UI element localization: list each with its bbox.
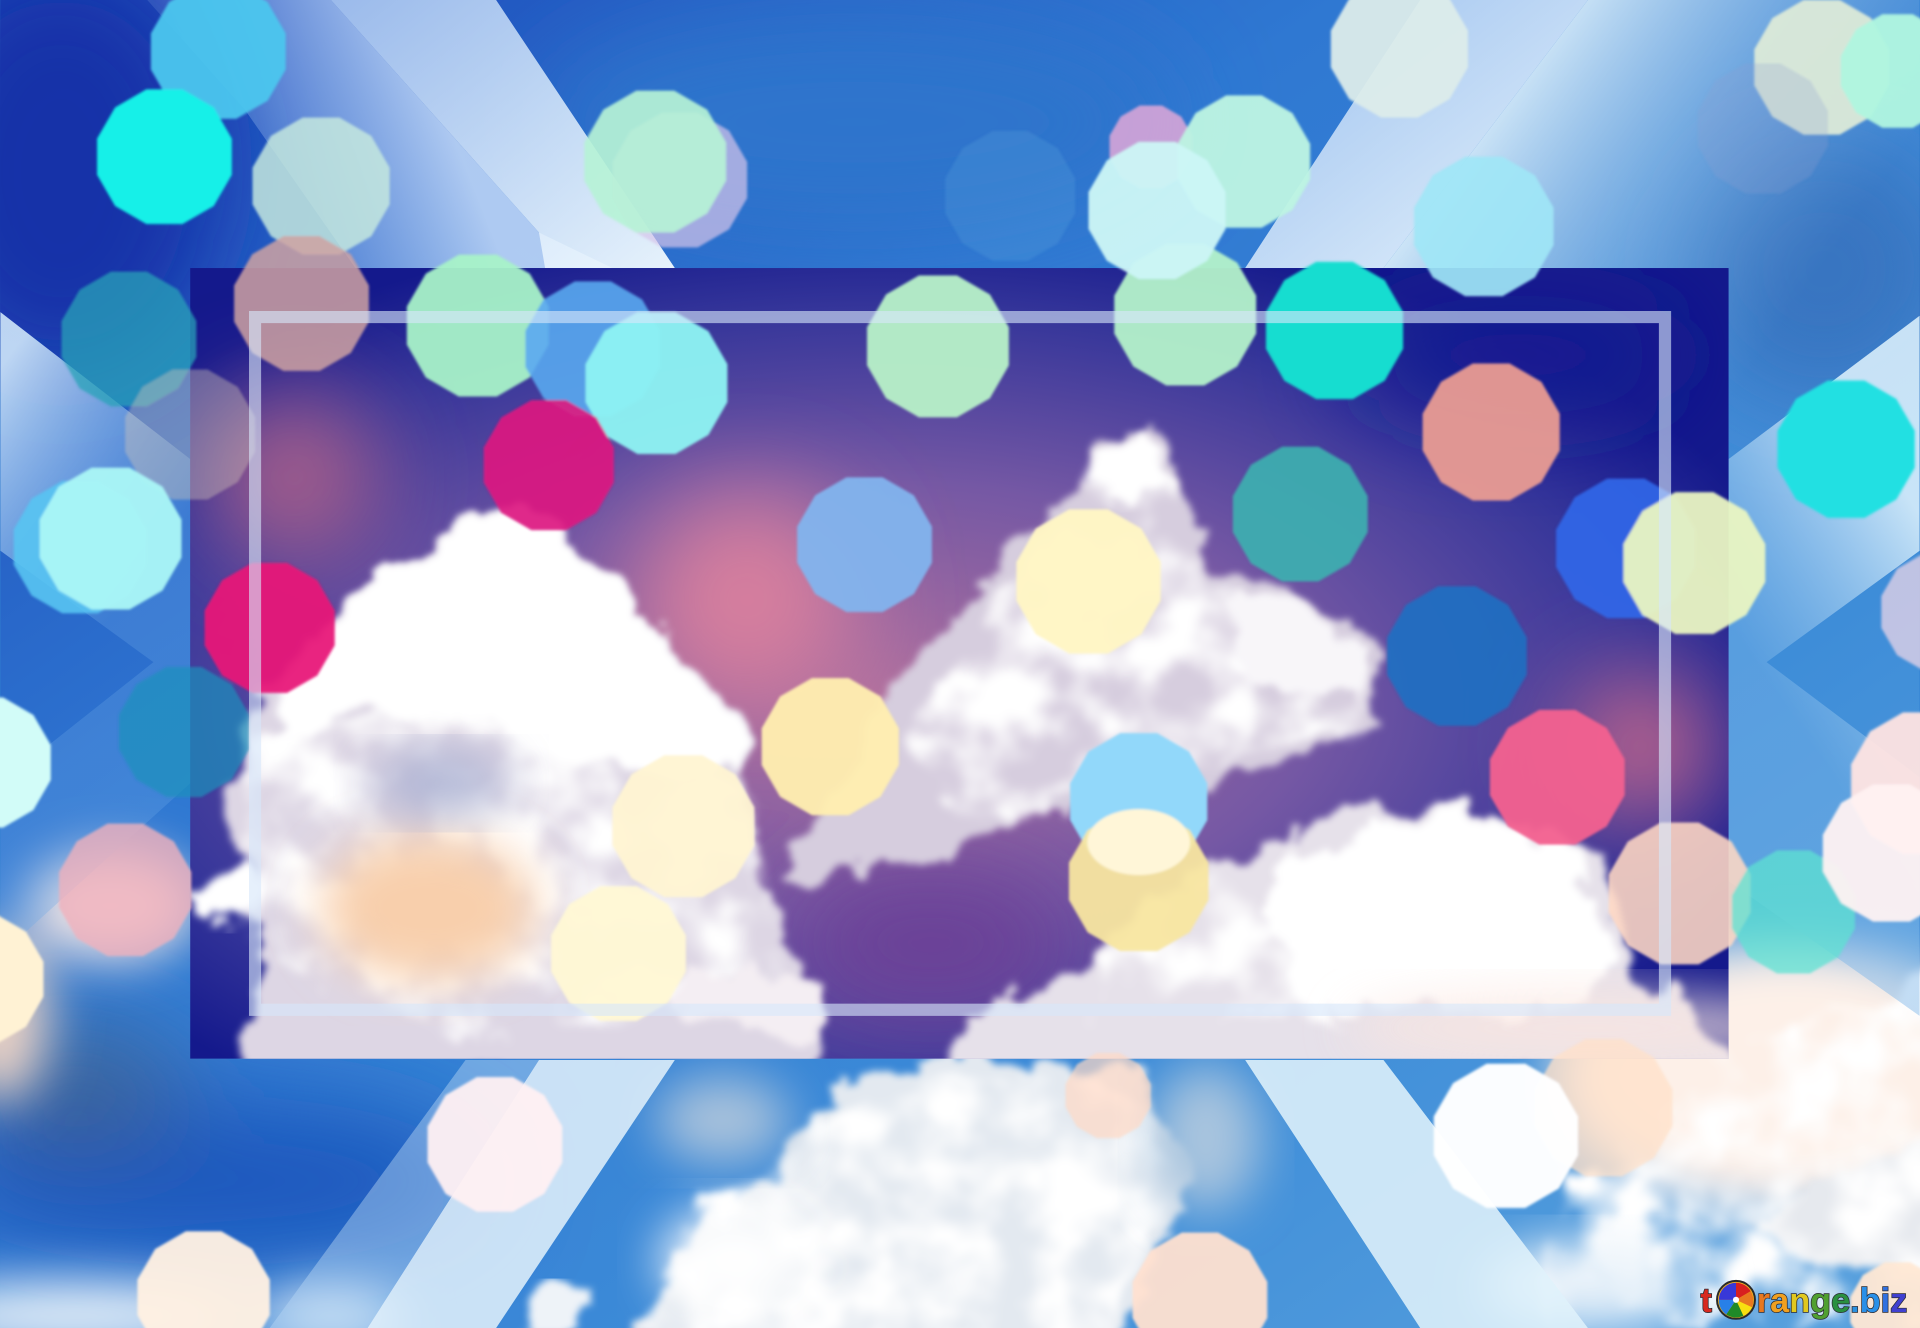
- shard: top left: [147, 0, 675, 268]
- bokeh group: panel top row: [407, 244, 1403, 530]
- bokeh group: left side: [0, 468, 335, 1044]
- shard: bottom right: [1245, 1060, 1588, 1328]
- shard: bottom left: [270, 1060, 675, 1328]
- watermark text: r: [1757, 1282, 1770, 1320]
- shard: left side: [0, 312, 190, 955]
- icon: colour wheel: [1717, 1281, 1755, 1319]
- panel colour glows: [208, 294, 1714, 1016]
- bokeh group: bottom row: [137, 1039, 1920, 1328]
- watermark text: t: [1700, 1282, 1712, 1320]
- shard: top right: [1245, 0, 1920, 459]
- panel bottom haze: [1370, 969, 1728, 1059]
- cloud: lower right: [1481, 942, 1920, 1328]
- inner frame: [255, 317, 1665, 1010]
- cloud: centre: [784, 428, 1381, 881]
- shard: right side: [1729, 316, 1920, 1016]
- bokeh group: top right: [945, 0, 1920, 296]
- panel fill: [190, 268, 1729, 1059]
- watermark: [1700, 1281, 1907, 1320]
- watermark text: ange.biz: [1770, 1282, 1907, 1320]
- bokeh group: far right: [1732, 381, 1920, 973]
- bokeh group: panel centre: [551, 447, 1368, 1021]
- cloud: lower left: [0, 851, 404, 1328]
- lower clouds: [0, 851, 1920, 1328]
- bokeh group: top left: [62, 0, 747, 500]
- bokeh group: panel right: [1387, 363, 1765, 964]
- cloud: lower right: [680, 798, 1751, 1077]
- cloud: left large: [184, 492, 820, 1077]
- cloud: bottom centre: [521, 1053, 1261, 1328]
- central dark panel: [184, 268, 1836, 1077]
